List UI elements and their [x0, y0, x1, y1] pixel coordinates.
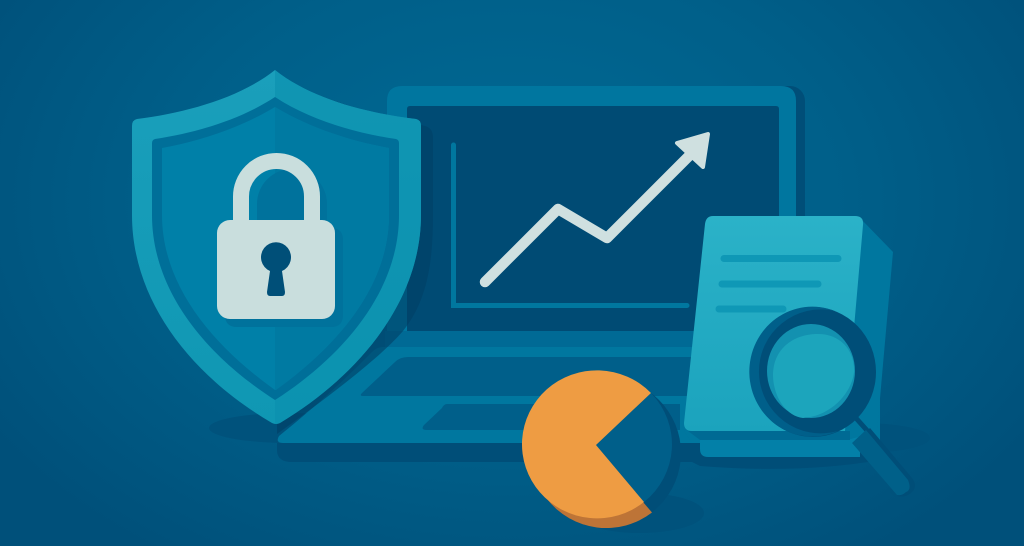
magnifying glass [749, 307, 915, 496]
shield inner face [162, 107, 389, 390]
padlock [217, 161, 343, 327]
pie dark rim [531, 378, 681, 528]
document [684, 216, 893, 457]
padlock keyhole [261, 242, 291, 296]
pie rim orange base [547, 499, 652, 528]
magnifier neck [855, 417, 872, 436]
magnifier handle [852, 430, 910, 495]
shield inner band [152, 97, 399, 400]
chart axes [454, 145, 687, 306]
magnifier ring [750, 307, 876, 437]
document lower shadow band [688, 431, 850, 440]
pie blue slice [596, 393, 672, 502]
laptop lid bezel [387, 86, 796, 331]
padlock shackle [241, 161, 312, 224]
magnifier glass face [773, 334, 854, 418]
shield shadow [276, 80, 433, 434]
laptop deck inner [361, 357, 880, 396]
magnifier handle edge [862, 428, 915, 496]
rising arrow line chart [485, 134, 708, 282]
magnifier ring light crescent [749, 307, 838, 437]
pie chart [522, 370, 681, 528]
shield rim right half tint [275, 70, 421, 424]
document page [684, 216, 863, 431]
laptop screen [407, 106, 779, 331]
pie orange slice [522, 370, 651, 518]
shield outer rim [132, 70, 421, 424]
laptop [277, 86, 880, 462]
laptop deck [278, 347, 880, 443]
laptop trackpad [423, 404, 680, 430]
document back page [700, 430, 860, 457]
shield [132, 70, 421, 424]
padlock shadow [225, 169, 343, 327]
ground shadows [209, 413, 930, 533]
laptop lid shadow [395, 86, 805, 336]
magnifier glass back [767, 324, 855, 418]
laptop hinge band [385, 331, 880, 347]
padlock body [217, 220, 335, 319]
document text lines [719, 258, 838, 309]
document side [684, 218, 893, 440]
shield inner face right half [275, 107, 389, 390]
laptop base shadow [277, 443, 880, 462]
